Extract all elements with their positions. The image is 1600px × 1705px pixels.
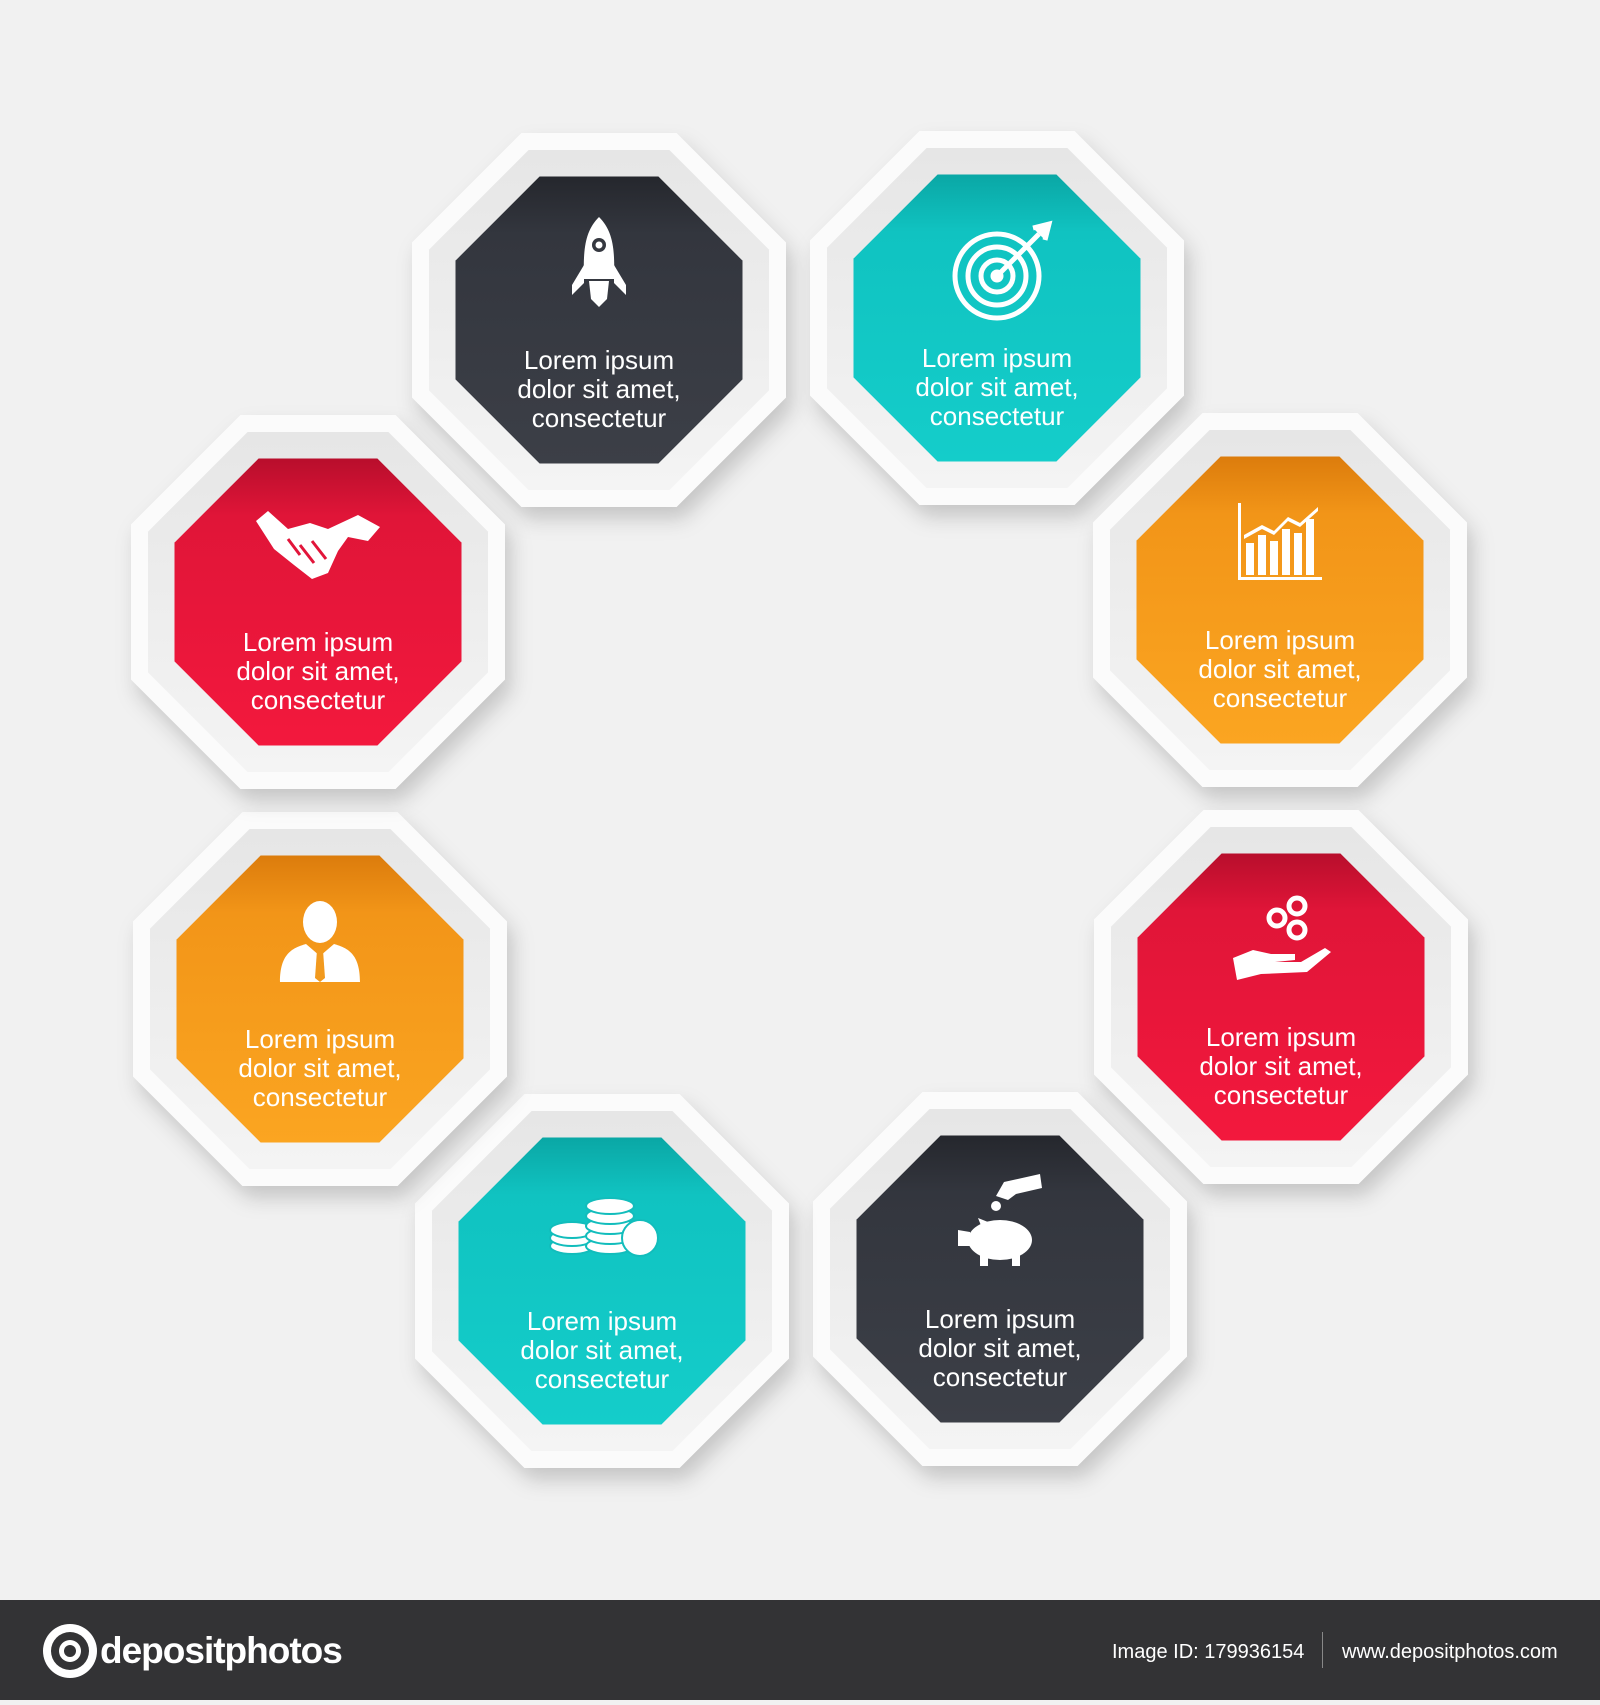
text block: dolor sit amet, (918, 1333, 1082, 1363)
text block: Lorem ipsum (922, 343, 1072, 373)
text block: consectetur (535, 1364, 670, 1394)
text block: dolor sit amet, (236, 656, 400, 686)
panel: item 4 red right (1094, 810, 1468, 1184)
panel: item 3 orange right (1093, 413, 1467, 787)
text block: Lorem ipsum (1206, 1022, 1356, 1052)
text block: Lorem ipsum (524, 345, 674, 375)
text block: Lorem ipsum (527, 1306, 677, 1336)
footer bar (0, 1600, 1600, 1700)
text block: dolor sit amet, (1199, 1051, 1363, 1081)
panel: item 8 red left (131, 415, 505, 789)
text block: consectetur (1213, 683, 1348, 713)
footer logo text: depositphotos (100, 1630, 342, 1671)
footer image id: Image ID: 179936154 (1112, 1641, 1304, 1663)
text block: Lorem ipsum (243, 627, 393, 657)
panel: item 1 dark top-left (412, 133, 786, 507)
icon: handshake (256, 511, 380, 579)
text block: consectetur (251, 685, 386, 715)
text block: Lorem ipsum (245, 1024, 395, 1054)
panel: item 7 orange left (133, 812, 507, 1186)
text block: consectetur (532, 403, 667, 433)
icon: rocket (572, 217, 626, 307)
text block: dolor sit amet, (520, 1335, 684, 1365)
icon: coins (550, 1198, 658, 1256)
text block: consectetur (1214, 1080, 1349, 1110)
panel: item 6 teal bottom (415, 1094, 789, 1468)
icon: target (955, 224, 1049, 318)
text block: consectetur (253, 1082, 388, 1112)
panel: item 2 teal top-right (810, 131, 1184, 505)
text block: consectetur (930, 401, 1065, 431)
text block: Lorem ipsum (925, 1304, 1075, 1334)
panel: item 5 dark bottom-right (813, 1092, 1187, 1466)
icon: piggy bank (958, 1174, 1042, 1266)
icon: hand with gears (1233, 898, 1331, 980)
text block: dolor sit amet, (517, 374, 681, 404)
text block: dolor sit amet, (1198, 654, 1362, 684)
text block: dolor sit amet, (238, 1053, 402, 1083)
icon: camera logo (43, 1624, 97, 1678)
text block: Lorem ipsum (1205, 625, 1355, 655)
text block: dolor sit amet, (915, 372, 1079, 402)
icon: bar chart (1238, 503, 1322, 580)
footer url: www.depositphotos.com (1341, 1641, 1558, 1663)
text block: consectetur (933, 1362, 1068, 1392)
icon: businessman (280, 901, 360, 982)
